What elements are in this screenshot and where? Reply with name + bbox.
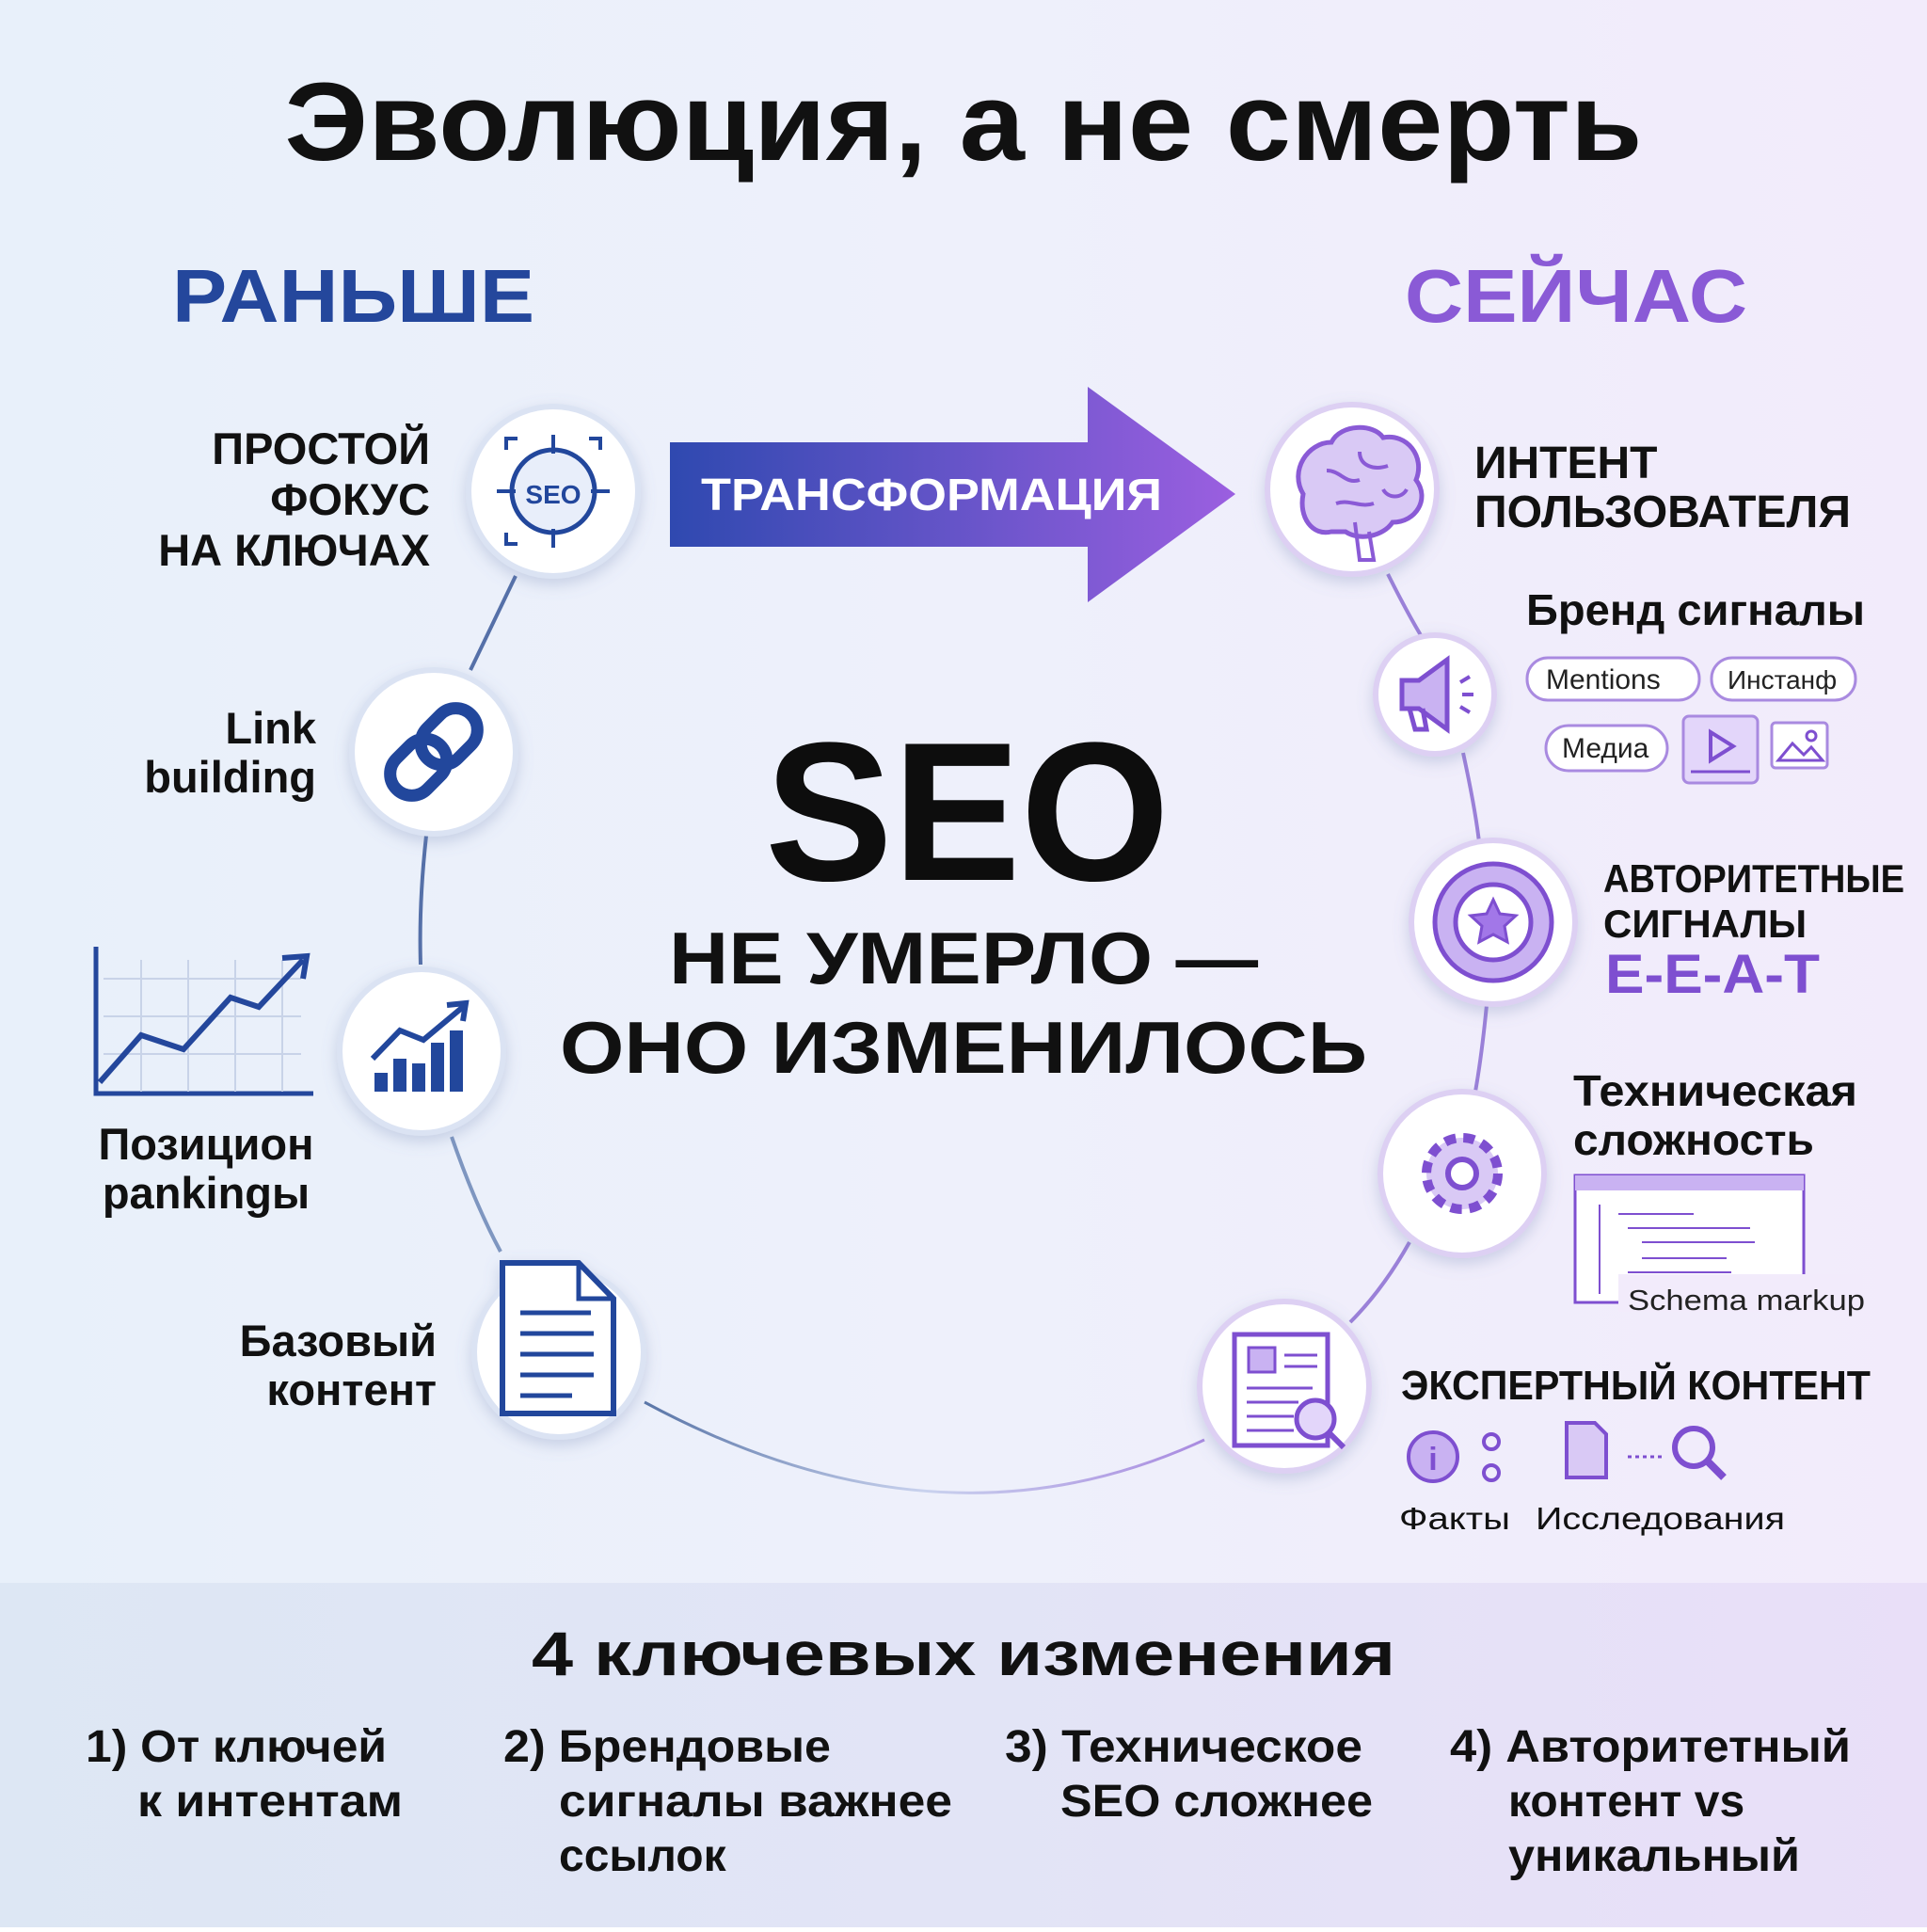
heading: now: СЕЙЧАС [1405, 253, 1747, 338]
text: user intent [1474, 439, 1851, 537]
arrow: transformation [670, 387, 1235, 602]
text: authority signals [1603, 856, 1904, 1005]
right circle: star badge [1411, 840, 1575, 1004]
text: expert content + facts/research: ЭКСПЕРТНЫЙ КОНТЕНТ [1401, 1361, 1871, 1409]
bottom list: 1) От ключей [86, 1722, 387, 1772]
left circle: rankings [340, 969, 503, 1133]
left circle: link [352, 670, 516, 834]
text: basic content: Базовый [240, 1316, 437, 1365]
center text: not dead: НЕ УМЕРЛО — [669, 917, 1258, 999]
text: expert content + facts/research: i [1428, 1442, 1438, 1477]
bottom list: ссылок [559, 1831, 727, 1881]
right circle: gear [1380, 1092, 1544, 1255]
text: user intent: ПОЛЬЗОВАТЕЛЯ [1474, 487, 1851, 537]
right circle: expert content [1200, 1301, 1369, 1471]
right circle: brain [1267, 405, 1437, 574]
text: user intent: ИНТЕНТ [1474, 439, 1657, 488]
connecting ring [421, 574, 1487, 1493]
center text: not dead: ОНО ИЗМЕНИЛОСЬ [560, 1006, 1367, 1089]
text: positions rankings: Позицион [98, 1119, 314, 1169]
text: brand signals + pills [1526, 585, 1865, 783]
text: simple keyword focus: НА КЛЮЧАХ [158, 525, 430, 575]
text: link building [144, 703, 317, 802]
title: Эволюция, а не смерть [284, 60, 1643, 184]
text: expert content + facts/research: Исследования [1536, 1501, 1785, 1536]
text: simple keyword focus: ПРОСТОЙ [212, 423, 430, 473]
left circle: SEO target [469, 407, 638, 576]
heading: before: РАНЬШЕ [172, 254, 534, 338]
bottom list: к интентам [137, 1777, 403, 1827]
chart icon [96, 947, 313, 1094]
text: simple keyword focus [158, 423, 430, 575]
text: authority signals: АВТОРИТЕТНЫЕ [1603, 856, 1904, 901]
arrow: transformation: ТРАНСФОРМАЦИЯ [701, 471, 1162, 520]
text: technical complexity + schema: Schema markup [1628, 1284, 1865, 1317]
text: positions rankings [98, 1119, 314, 1218]
text: positions rankings: рankingы [103, 1168, 310, 1218]
text: authority signals: E-E-A-T [1605, 944, 1820, 1005]
text: brand signals + pills: Инстанф [1728, 665, 1837, 695]
center text: SEO: SEO [765, 701, 1170, 922]
text: brand signals + pills: Бренд сигналы [1526, 585, 1865, 634]
text: technical complexity + schema: Техническая [1573, 1066, 1857, 1115]
bottom list [86, 1722, 1851, 1881]
text: basic content [240, 1316, 437, 1414]
bottom list: 2) Брендовые [503, 1722, 831, 1772]
left circle: basic content [474, 1263, 644, 1437]
right circle: megaphone [1376, 635, 1494, 754]
bottom list: контент vs [1508, 1777, 1744, 1827]
bottom list: сигналы важнее [559, 1777, 952, 1827]
text: link building: Link [225, 703, 317, 753]
text: simple keyword focus: ФОКУС [270, 474, 430, 524]
text: link building: building [144, 752, 316, 802]
text: expert content + facts/research: Факты [1399, 1501, 1510, 1536]
text: technical complexity + schema: сложность [1573, 1115, 1814, 1164]
text: expert content + facts/research [1399, 1361, 1871, 1536]
bottom list: SEO сложнее [1060, 1777, 1373, 1827]
text: basic content: контент [266, 1365, 437, 1414]
center text: not dead [560, 917, 1367, 1089]
text: technical complexity + schema [1573, 1066, 1865, 1317]
bottom list: 3) Техническое [1005, 1722, 1362, 1772]
text: brand signals + pills: Mentions [1546, 664, 1661, 695]
bottom heading: 4 ключевых изменения [532, 1619, 1395, 1688]
bottom list: 4) Авторитетный [1450, 1722, 1851, 1772]
bottom list: уникальный [1508, 1831, 1800, 1881]
left circle: SEO target: SEO [525, 480, 581, 509]
text: authority signals: СИГНАЛЫ [1603, 902, 1807, 946]
text: brand signals + pills: Медиа [1562, 733, 1649, 764]
